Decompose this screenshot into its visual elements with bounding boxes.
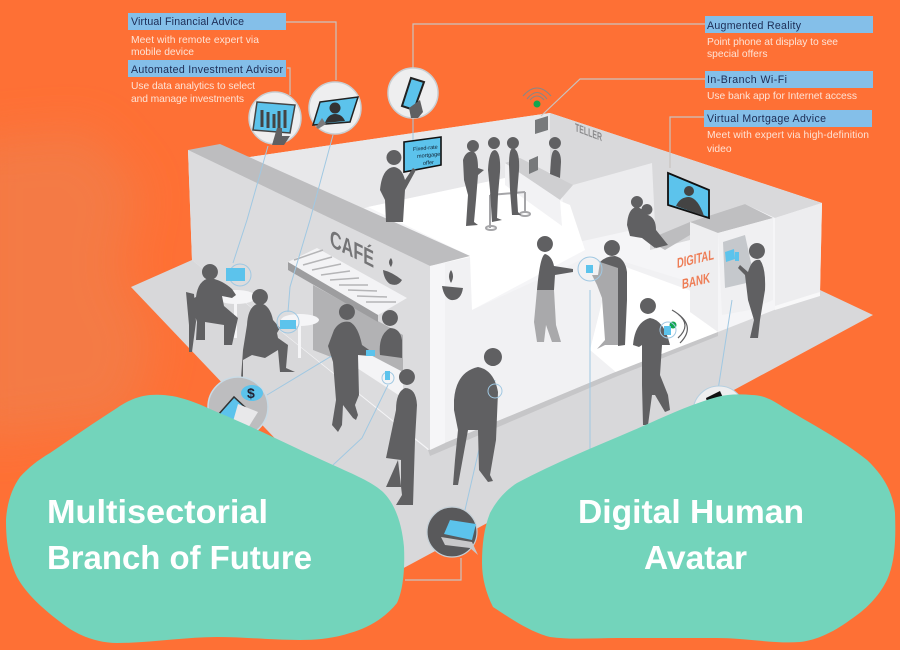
blob: multisectorial branch of future: Branch of Future: [47, 539, 312, 576]
callout circle: kiosk phone: [693, 386, 745, 438]
floor: [131, 260, 873, 570]
callout circle: virtual financial advice: [309, 82, 361, 134]
label: automated investment advisor: and manage investments: [131, 94, 244, 105]
running man: [633, 298, 670, 425]
label: in-branch wi-fi: In-Branch Wi-Fi: [707, 74, 787, 86]
blob: digital human avatar: Avatar: [644, 539, 747, 576]
cafe counter: [357, 348, 403, 398]
icon: wifi by runner: [670, 310, 687, 343]
callout circle: mobile payment: $: [247, 385, 255, 401]
connector: virtual financial advice: [286, 22, 336, 80]
label: augmented reality: special offers: [707, 49, 767, 60]
callout circle: augmented reality phone: [388, 68, 438, 118]
blob: multisectorial branch of future: Multisectorial: [47, 493, 268, 530]
label: automated investment advisor: Use data analytics to select: [131, 81, 255, 92]
cafe tables: [216, 290, 319, 358]
queue man 1: [463, 140, 484, 226]
kiosk woman: [738, 243, 765, 338]
callout circle: mobile payment: [208, 377, 268, 437]
seated woman: [241, 289, 295, 378]
label: automated investment advisor: Automated Investment Advisor: [131, 64, 283, 76]
businessman with watch: [453, 348, 502, 485]
man at mortgage display: [380, 150, 416, 222]
fixed-rate mortgage display: [404, 137, 441, 172]
connector: virtual mortgage: [670, 117, 704, 168]
label: virtual financial advice: [128, 13, 286, 58]
teller counter: [505, 156, 573, 226]
label: virtual financial advice: Virtual Financial Advice: [131, 16, 244, 28]
icon: coffee cup on end wall: [442, 270, 463, 300]
illustration: bank branch floor plan: [131, 88, 873, 570]
cafe sign: CAFÉ: [330, 224, 374, 274]
digital bank sign: BANK: [682, 270, 711, 293]
video mortgage screen: [668, 173, 709, 218]
label: augmented reality: Augmented Reality: [707, 20, 802, 32]
blob: digital human avatar: Digital Human: [578, 493, 804, 530]
mortgage clients: [627, 196, 668, 248]
cafe kiosk recess: [313, 285, 403, 385]
man with phone: [592, 240, 627, 349]
label: virtual financial advice: mobile device: [131, 47, 194, 58]
small blue callout rings: [229, 257, 676, 398]
label: virtual financial advice: Meet with remote expert via: [131, 35, 259, 46]
fixed-rate mortgage display: mortgage: [417, 152, 440, 160]
callout circle: automated advisor: [249, 92, 301, 145]
icon: wifi on back wall: [523, 88, 551, 134]
front glass wall: [428, 257, 718, 450]
man at cafe counter: [328, 304, 372, 432]
blob: multisectorial branch of future: [6, 395, 404, 643]
label: virtual mortgage advice: Meet with expert via high-definition: [707, 130, 869, 141]
woman talking: [534, 236, 573, 342]
queue woman: [507, 137, 521, 215]
connector: automated investment advisor: [287, 68, 290, 95]
barista: [380, 310, 402, 358]
teller sign: TELLER: [575, 120, 602, 144]
fixed-rate mortgage display: Fixed-rate: [413, 145, 438, 153]
right wall: [550, 113, 822, 250]
connector: in-branch wi-fi: [541, 79, 705, 116]
label: augmented reality: Point phone at display to see: [707, 37, 838, 48]
icon: coffee cup on sign: [383, 258, 402, 285]
back wall: [250, 113, 550, 230]
seated man: [186, 264, 238, 352]
label: automated investment advisor: [128, 60, 286, 105]
teller: [549, 137, 561, 178]
blob: digital human avatar: [482, 394, 895, 642]
building base: [188, 113, 822, 450]
label: virtual mortgage advice: [704, 110, 872, 155]
callout circle: QR receipt: [427, 507, 478, 557]
small devices: [226, 252, 739, 380]
connector: QR receipt: [405, 558, 461, 580]
mortgage desk: [647, 222, 690, 250]
label: augmented reality: [705, 16, 873, 60]
fixed-rate mortgage display: offer: [423, 160, 434, 167]
woman with handbag: [386, 369, 417, 505]
digital bank sign: [677, 247, 714, 293]
connector lines: [233, 118, 732, 510]
queue man 2: [488, 137, 502, 222]
label: in-branch wi-fi: Use bank app for Internet access: [707, 91, 857, 102]
partition face: [562, 163, 655, 245]
digital bank sign: DIGITAL: [677, 247, 714, 272]
awning: [288, 248, 407, 322]
connector: augmented reality: [413, 24, 705, 68]
label: virtual mortgage advice: Virtual Mortgage Advice: [707, 113, 826, 125]
label: virtual mortgage advice: video: [707, 144, 732, 155]
interior white floor: [368, 178, 585, 310]
digital bank kiosk: [690, 203, 822, 332]
cafe wall: [188, 144, 470, 450]
label: in-branch wi-fi: [705, 71, 873, 102]
queue barrier: [486, 192, 530, 230]
